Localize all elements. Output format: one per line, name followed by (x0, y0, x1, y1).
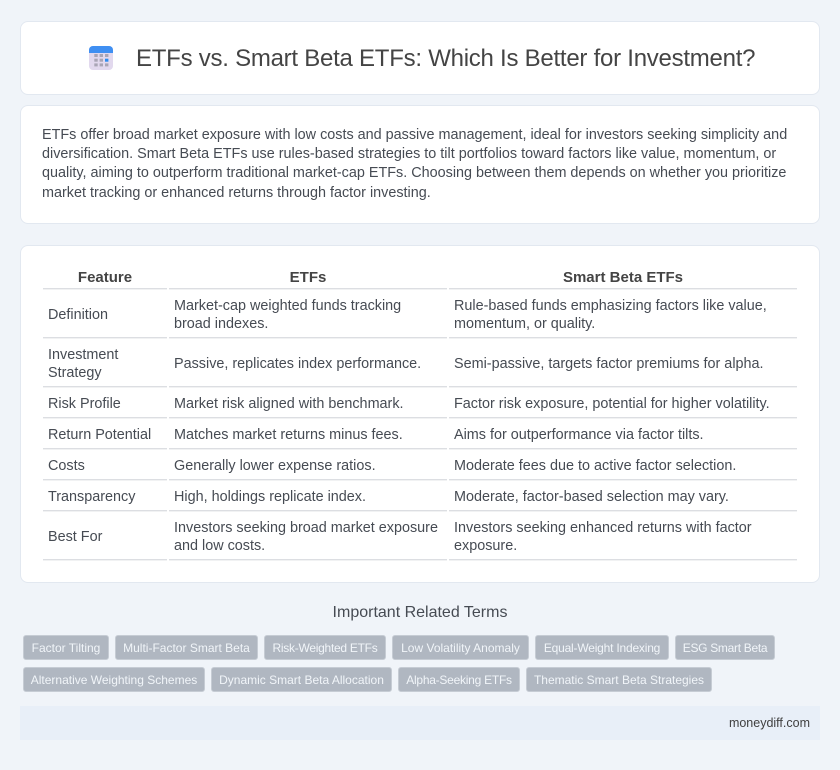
row: definition: Market-cap weighted funds tracking (174, 298, 401, 314)
intro text: quality, aiming to outperform traditional market-cap ETFs. Choosing between them depends on whether you prioritize (42, 165, 786, 181)
row: definition (48, 298, 767, 332)
row: transparency: Moderate, factor-based selection may vary. (454, 489, 729, 505)
row: return potential (48, 427, 704, 443)
related terms chips: Multi-Factor Smart Beta (123, 641, 250, 655)
row: definition: momentum, or quality. (454, 316, 595, 332)
title: ETFs vs. Smart Beta ETFs: Which Is Better for Investment? (136, 45, 755, 72)
footer (20, 706, 820, 740)
related terms chips: Factor Tilting (32, 641, 100, 655)
row: costs: Generally lower expense ratios. (174, 458, 376, 474)
row: costs: Moderate fees due to active factor selection. (454, 458, 736, 474)
row: investment strategy: Strategy (48, 365, 102, 381)
footer source: moneydiff.com (729, 716, 810, 730)
related terms chips: Risk-Weighted ETFs (273, 641, 377, 655)
related terms chips: Equal-Weight Indexing (544, 641, 660, 655)
row: transparency: Transparency (48, 489, 135, 505)
row: costs: Costs (48, 458, 85, 474)
row: risk profile: Market risk aligned with benchmark. (174, 396, 404, 412)
row: best for: Investors seeking enhanced returns with factor (454, 520, 752, 536)
row: best for: exposure. (454, 538, 517, 554)
row: return potential: Return Potential (48, 427, 151, 443)
row: investment strategy: Semi-passive, targets factor premiums for alpha. (454, 356, 764, 372)
related terms heading: Important Related Terms (333, 604, 507, 621)
row: definition: broad indexes. (174, 316, 268, 332)
related terms chips: Dynamic Smart Beta Allocation (219, 673, 384, 687)
icon: calendar grid (89, 46, 113, 70)
comparison table (43, 269, 797, 561)
related terms chips: Thematic Smart Beta Strategies (534, 673, 704, 687)
row: transparency (48, 489, 729, 505)
table header: Feature (78, 269, 132, 286)
intro text: market tracking or enhanced returns through factor investing. (42, 185, 431, 201)
table header: ETFs (290, 269, 326, 286)
row: investment strategy: Investment (48, 347, 118, 363)
row: transparency: High, holdings replicate index. (174, 489, 366, 505)
row: best for: and low costs. (174, 538, 265, 554)
row: risk profile: Factor risk exposure, potential for higher volatility. (454, 396, 770, 412)
intro text: ETFs offer broad market exposure with low costs and passive management, ideal for investors seeking simplicity and (42, 127, 787, 143)
row: best for: Best For (48, 529, 102, 545)
row: best for (48, 520, 752, 554)
header card (20, 21, 820, 95)
comparison table panel (20, 245, 820, 583)
related terms chips: Alternative Weighting Schemes (31, 673, 197, 687)
row: definition: Rule-based funds emphasizing factors like value, (454, 298, 767, 314)
intro text (42, 127, 787, 201)
row: investment strategy: Passive, replicates index performance. (174, 356, 421, 372)
row: return potential: Matches market returns minus fees. (174, 427, 403, 443)
row: risk profile (48, 396, 770, 412)
related terms chips (23, 635, 775, 692)
related terms chips: Alpha-Seeking ETFs (406, 673, 512, 687)
row: investment strategy (48, 347, 764, 381)
row: best for: Investors seeking broad market exposure (174, 520, 438, 536)
related terms chips: Low Volatility Anomaly (401, 641, 520, 655)
row: costs (48, 458, 736, 474)
intro panel (20, 105, 820, 224)
related terms chips: ESG Smart Beta (683, 641, 767, 655)
row: risk profile: Risk Profile (48, 396, 121, 412)
row: definition: Definition (48, 307, 108, 323)
intro text: diversification. Smart Beta ETFs use rules-based strategies to tilt portfolios toward factors like value, momentum, or (42, 146, 776, 162)
table header (78, 269, 683, 286)
row: return potential: Aims for outperformance via factor tilts. (454, 427, 704, 443)
table header: Smart Beta ETFs (563, 269, 683, 286)
